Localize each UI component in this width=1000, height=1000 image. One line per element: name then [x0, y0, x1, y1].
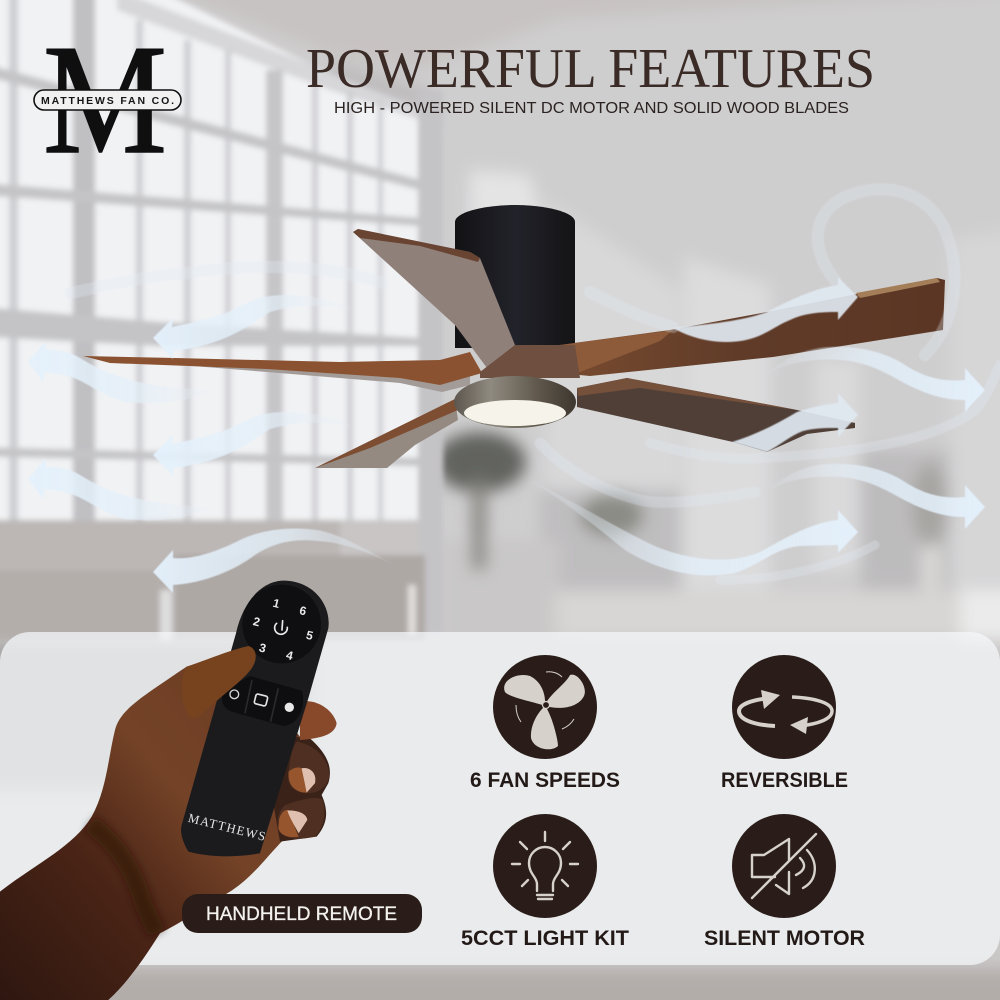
feature: 6 fan speeds — [470, 655, 620, 792]
arrow: right 3 — [732, 393, 858, 452]
arrow: right 4 — [770, 464, 985, 529]
logo: M — [43, 12, 167, 186]
wrist shading — [90, 823, 157, 933]
hand holding remote — [0, 581, 337, 1000]
remote numbers: 6 — [298, 603, 308, 618]
remote numbers — [252, 596, 315, 663]
arrow: left 1 — [153, 295, 352, 359]
arrow: right 5 — [530, 480, 858, 575]
light kit ring — [454, 376, 576, 428]
remote numbers: 2 — [252, 614, 262, 629]
remote mode buttons — [222, 676, 303, 726]
fan blade: upper left — [353, 229, 515, 372]
arrow: right 1 — [673, 277, 858, 342]
remote label pill: HANDHELD REMOTE — [206, 904, 397, 925]
fingertip middle — [289, 767, 307, 793]
index finger — [300, 701, 337, 740]
fan blade: lower right — [577, 378, 855, 452]
remote power icon — [275, 621, 287, 634]
fan canopy — [455, 205, 575, 348]
remote numbers: 4 — [285, 648, 295, 663]
subtitle: HIGH - POWERED SILENT DC MOTOR AND SOLID WOOD BLADES — [334, 100, 849, 117]
title: POWERFUL FEATURES — [306, 38, 875, 100]
icon: fan — [493, 655, 597, 759]
hand — [0, 653, 300, 1000]
remote label pill — [182, 894, 422, 933]
finger backing — [273, 737, 330, 842]
arrow: right 2 — [770, 347, 985, 412]
translucent features panel — [0, 632, 1000, 965]
fan blade: right upper — [545, 278, 945, 376]
remote brand text: MATTHEWS — [187, 811, 267, 844]
feature: 5cct light kit — [461, 814, 629, 950]
icon: light bulb — [493, 814, 597, 918]
arrow: left 5 — [153, 528, 400, 593]
remote dial — [242, 585, 321, 663]
arrow: left 2 — [28, 342, 213, 403]
arrow: left 3 — [153, 412, 352, 476]
light kit lens — [464, 400, 566, 426]
icon: rotate arrows — [732, 655, 836, 759]
fan blade: left — [83, 352, 482, 392]
air flow arrows — [28, 277, 985, 593]
feature: silent motor — [704, 814, 865, 950]
fingertip ring — [278, 810, 299, 837]
ring finger — [278, 798, 324, 839]
fingernails — [287, 768, 315, 833]
fan blade: lower left — [315, 399, 458, 468]
fan hub — [480, 345, 580, 378]
label: REVERSIBLE — [721, 768, 848, 792]
feature: reversible — [721, 655, 848, 792]
thumb — [182, 646, 256, 718]
label: 5CCT LIGHT KIT — [461, 926, 629, 950]
arrow: left 4 — [28, 459, 213, 520]
faint air trails and swirl — [70, 189, 1000, 580]
remote numbers: 5 — [305, 628, 315, 643]
label: 6 FAN SPEEDS — [470, 768, 620, 792]
remote body — [181, 581, 329, 856]
middle finger — [288, 742, 329, 793]
remote numbers: 1 — [271, 596, 282, 611]
icon: muted speaker — [732, 814, 836, 918]
label: SILENT MOTOR — [704, 926, 865, 950]
logo: MATTHEWS FAN CO. — [41, 95, 174, 107]
remote numbers: 3 — [258, 641, 268, 656]
ceiling fan — [83, 205, 945, 468]
